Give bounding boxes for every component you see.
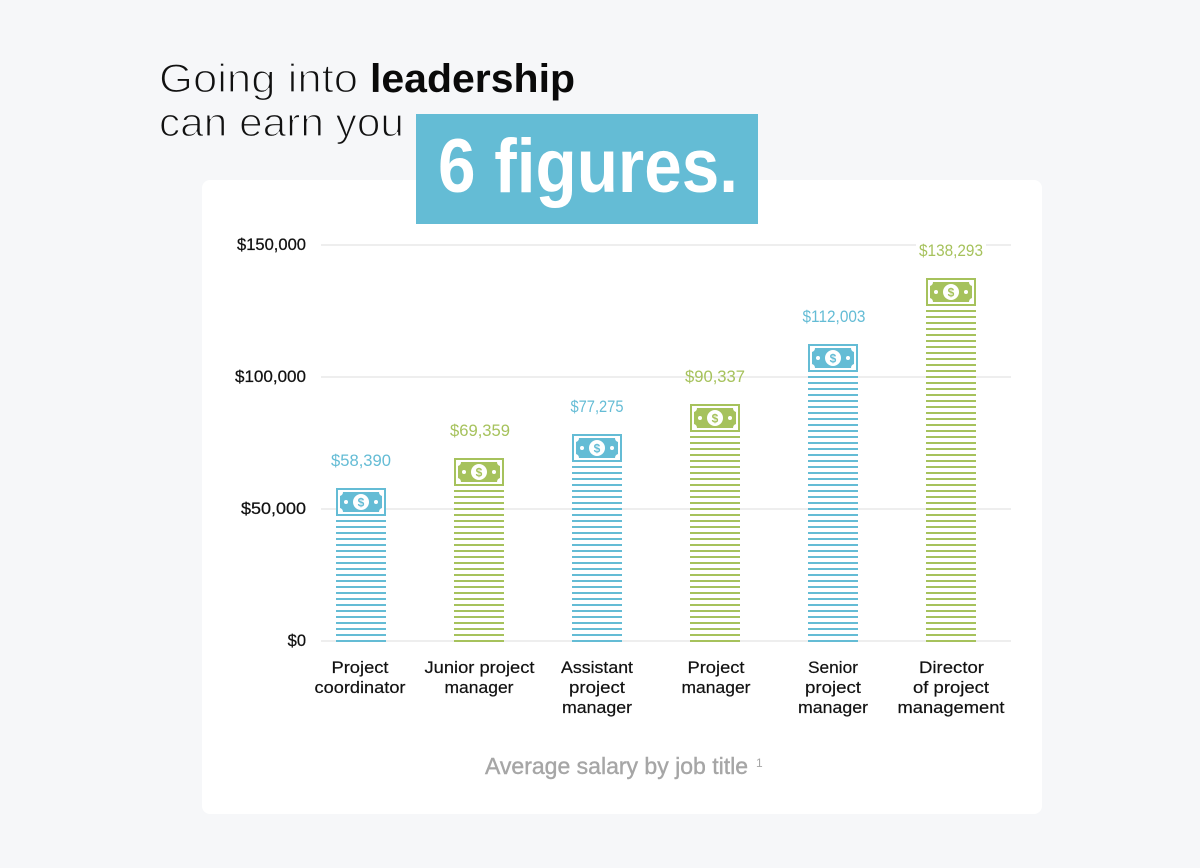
icon: dollar bill: $ [358, 496, 365, 510]
x axis labels: Project [332, 659, 389, 677]
y axis labels: $0 [288, 632, 306, 650]
y axis labels: $50,000 [241, 500, 306, 518]
panel: chart card [202, 180, 1042, 814]
icon: dollar bill: $ [594, 442, 601, 456]
value label: $112,003 [802, 308, 866, 326]
title [159, 57, 575, 145]
x axis labels: manager [562, 699, 633, 717]
value label: $90,337 [685, 368, 745, 386]
x axis labels: project [805, 679, 861, 697]
caption: 1 [756, 756, 763, 770]
icon: dollar bill [809, 345, 857, 371]
callout: 6 figures [416, 114, 758, 224]
icon: dollar bill [927, 279, 975, 305]
caption: Average salary by job title [485, 753, 748, 779]
x axis labels: manager [682, 679, 751, 697]
x axis labels: project [569, 679, 625, 697]
x axis labels [314, 659, 1005, 717]
value label: $77,275 [570, 398, 624, 416]
bar: Project manager [685, 368, 745, 642]
icon: dollar bill [455, 459, 503, 485]
x axis labels: manager [444, 679, 514, 697]
x axis labels: Assistant [561, 659, 633, 677]
bar: Project coordinator [331, 452, 391, 642]
y axis labels: $100,000 [235, 368, 306, 386]
y axis labels [235, 236, 306, 650]
icon: dollar bill: $ [476, 466, 483, 480]
bar: Assistant project manager [570, 398, 624, 642]
bar: Director of project management [916, 240, 986, 642]
x axis labels: Junior project [424, 659, 535, 677]
bar: Junior project manager [450, 422, 510, 642]
x axis labels: manager [798, 699, 869, 717]
y axis grid lines [321, 244, 1011, 642]
chart: average salary by job title [235, 236, 1011, 717]
x axis labels: Director [919, 659, 985, 677]
x axis labels: Project [688, 659, 745, 677]
title: Going into [159, 57, 358, 101]
x axis labels: of project [913, 679, 989, 697]
title: leadership [370, 57, 575, 101]
bar: Senior project manager [802, 308, 866, 642]
icon: dollar bill: $ [712, 412, 719, 426]
value label: $69,359 [450, 422, 510, 440]
x axis labels: management [898, 699, 1005, 717]
title: can earn you [159, 101, 404, 145]
icon: dollar bill: $ [830, 352, 837, 366]
icon: dollar bill [691, 405, 739, 431]
value label: $138,293 [919, 242, 983, 260]
icon: dollar bill: $ [948, 286, 955, 300]
icon: dollar bill [573, 435, 621, 461]
value label: $58,390 [331, 452, 391, 470]
icon: dollar bill [337, 489, 385, 515]
y axis labels: $150,000 [237, 236, 306, 254]
x axis labels: Senior [808, 659, 859, 677]
x axis labels: coordinator [314, 679, 406, 697]
callout: 6 figures: 6 figures. [438, 124, 738, 209]
